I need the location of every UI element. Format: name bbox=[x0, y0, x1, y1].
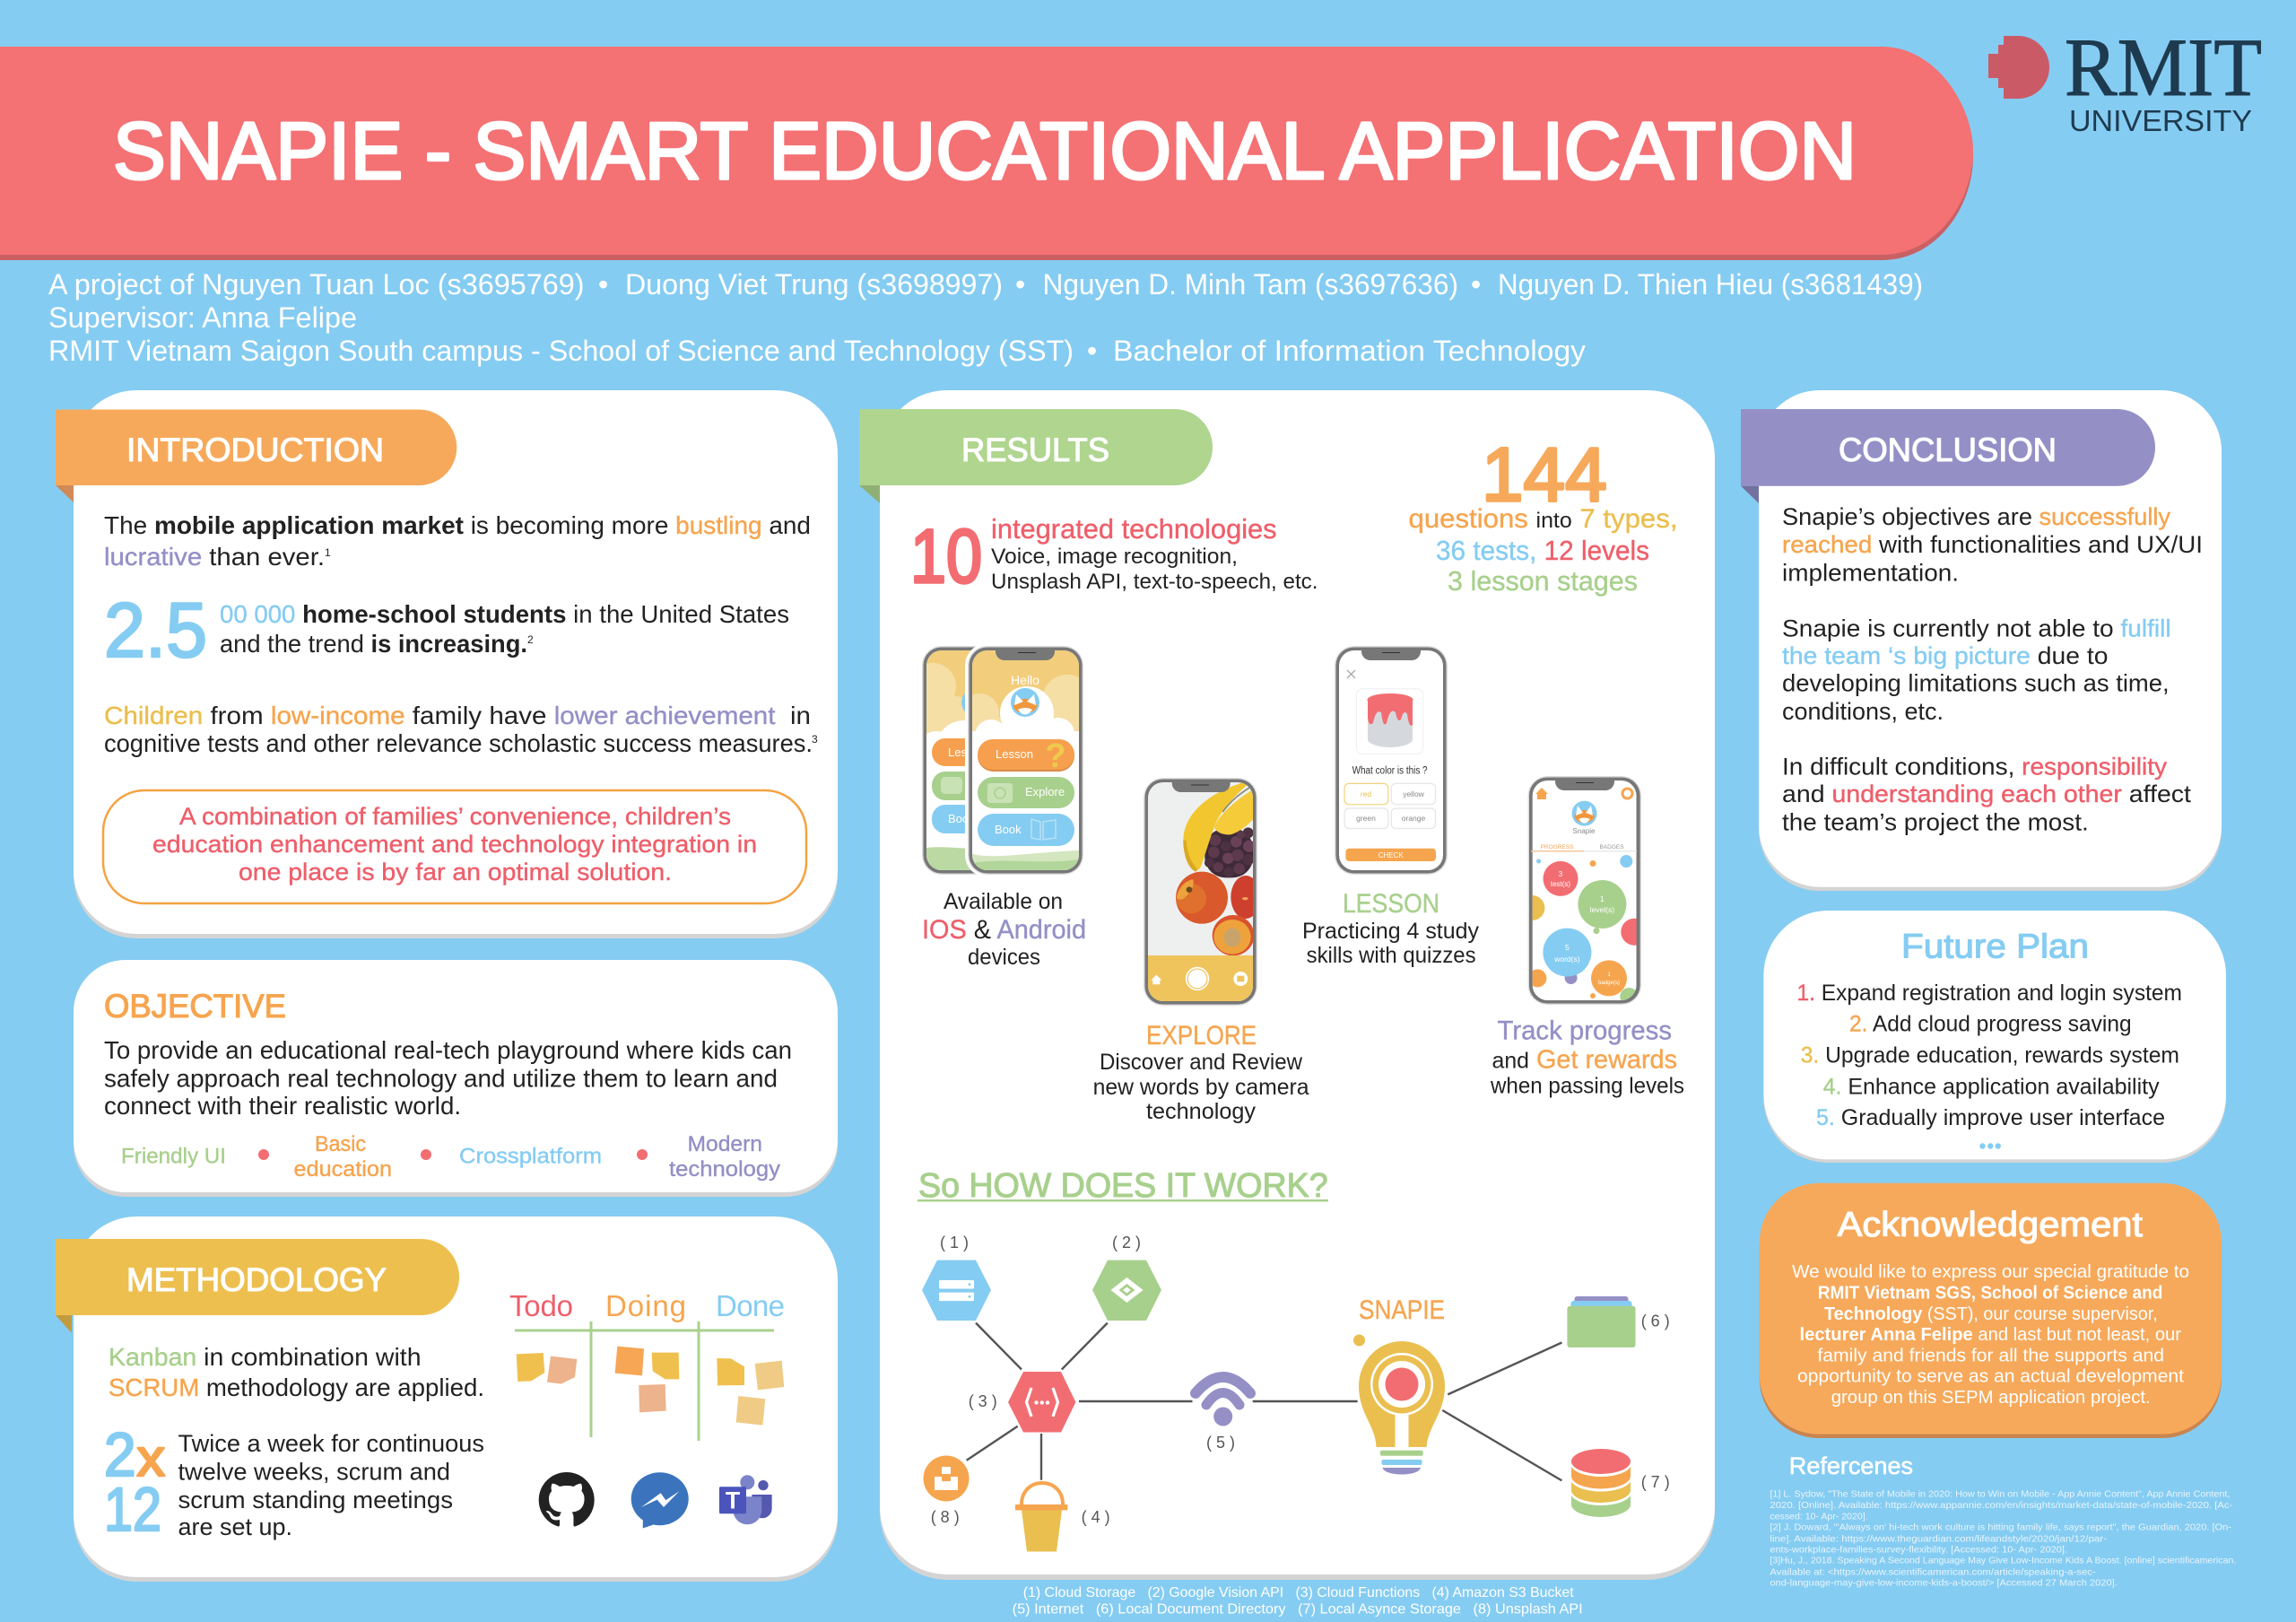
text: objective description: safely approach real technology and utilize them to learn and bbox=[104, 1064, 778, 1093]
icon: internet wifi bbox=[1196, 1377, 1250, 1452]
panel: introduction bbox=[56, 390, 838, 938]
phone: progress screen: 3 bbox=[1559, 870, 1563, 878]
stat: 2.5 million home-school students: 2 bbox=[527, 633, 534, 646]
kanban board: Todo bbox=[509, 1289, 573, 1322]
stat: 10 integrated technologies: Unsplash API, text-to-speech, etc. bbox=[991, 570, 1318, 594]
project authors and affiliation: Duong Viet Trung (s3698997) bbox=[625, 268, 1003, 301]
connector lines bbox=[967, 1323, 1561, 1480]
RMIT University logo: RMIT bbox=[2065, 22, 2262, 113]
stat: 10 integrated technologies: integrated technologies bbox=[991, 513, 1277, 545]
icon: local document directory bbox=[1567, 1296, 1670, 1347]
kanban board: Done bbox=[716, 1289, 785, 1322]
phone: progress screen: word(s) bbox=[1553, 955, 1580, 964]
caption: explore: new words by camera bbox=[1093, 1075, 1309, 1100]
text: mobile market bbox=[104, 511, 811, 571]
phone: progress screen: PROGRESS bbox=[1541, 844, 1574, 850]
phone: progress screen: badge(s) bbox=[1598, 981, 1620, 986]
heading: results ribbon bbox=[859, 409, 1213, 503]
stat: 2x 12: 12 bbox=[104, 1475, 161, 1544]
icon: google vision api bbox=[1092, 1234, 1161, 1321]
project authors and affiliation: Supervisor: Anna Felipe bbox=[48, 301, 357, 334]
panel: future plan bbox=[1763, 911, 2226, 1163]
text: scrum meetings bbox=[178, 1430, 484, 1540]
icon: cloud functions bbox=[969, 1372, 1075, 1432]
icon: microsoft teams bbox=[719, 1475, 772, 1524]
text: low-income children bbox=[104, 702, 818, 757]
heading: introduction ribbon: INTRODUCTION bbox=[126, 432, 384, 468]
phone: lesson quiz screen: green bbox=[1356, 814, 1376, 823]
caption: track progress: when passing levels bbox=[1490, 1073, 1684, 1098]
text: teamwork: the team’s project the most. bbox=[1782, 809, 2089, 836]
phone: progress screen: level(s) bbox=[1590, 905, 1614, 914]
stat: 144 questions: 36 tests, 12 levels bbox=[1436, 535, 1649, 566]
text: objectives reached: implementation. bbox=[1782, 559, 1959, 586]
project authors and affiliation: • bbox=[1471, 268, 1481, 301]
icon: local document directory: ( 6 ) bbox=[1641, 1312, 1670, 1330]
references bbox=[1770, 1452, 2236, 1589]
title banner bbox=[0, 47, 1973, 260]
diagram legend: (1) Cloud Storage (2) Google Vision API (3) Cloud Functions (4) Amazon S3 Bucket bbox=[1023, 1585, 1574, 1600]
RMIT University logo bbox=[1988, 22, 2262, 137]
future plan list bbox=[1797, 981, 2182, 1149]
caption: explore bbox=[1093, 1021, 1309, 1124]
objective keywords: education bbox=[294, 1157, 392, 1182]
text: low-income children: cognitive tests and other relevance scholastic success measures. bbox=[104, 729, 813, 757]
icon: microsoft teams: T bbox=[726, 1487, 740, 1514]
text: acknowledgement body: We would like to express our special gratitude to bbox=[1792, 1261, 2189, 1282]
project authors and affiliation: Bachelor of Information Technology bbox=[1113, 335, 1586, 367]
phone: progress screen: 1 bbox=[1600, 894, 1605, 903]
text: objectives reached bbox=[1782, 503, 2203, 586]
heading: results ribbon: RESULTS bbox=[961, 432, 1109, 468]
references: [1] L. Sydow, "The State of Mobile in 2020: How to Win on Mobile - App Annie Content", App Annie Content, bbox=[1770, 1488, 2230, 1499]
text: teamwork: In difficult conditions, responsibility bbox=[1782, 754, 2168, 780]
objective keywords: technology bbox=[669, 1157, 780, 1182]
stat: 144 questions: 3 lesson stages bbox=[1448, 565, 1638, 597]
heading: conclusion ribbon: CONCLUSION bbox=[1839, 432, 2057, 468]
phone: progress screen: BADGES bbox=[1599, 844, 1624, 850]
icon: unsplash api: ( 8 ) bbox=[931, 1508, 960, 1526]
stat: 144 questions: questions into 7 types, bbox=[1408, 504, 1677, 534]
text: low-income children: 3 bbox=[812, 733, 818, 746]
icon: cloud functions: ( 3 ) bbox=[969, 1392, 997, 1410]
text: objectives reached: reached with functionalities and UX/UI bbox=[1782, 531, 2203, 558]
phone: progress screen bbox=[1528, 776, 1641, 1005]
future plan list: 5. Gradually improve user interface bbox=[1816, 1105, 2165, 1130]
icon: messenger bbox=[631, 1472, 689, 1529]
project authors and affiliation: • bbox=[1087, 335, 1097, 367]
stat: 2.5 million home-school students: 2.5 bbox=[104, 588, 207, 674]
text: kanban and scrum: Kanban in combination with bbox=[109, 1343, 422, 1371]
phone: home screen front: Lesson bbox=[996, 747, 1033, 761]
references: Refercenes bbox=[1789, 1452, 1913, 1479]
diagram legend bbox=[1013, 1585, 1583, 1617]
phone: progress screen: Snapie bbox=[1573, 827, 1596, 835]
phone: progress screen: 1 bbox=[1607, 972, 1611, 978]
text: acknowledgement body bbox=[1792, 1261, 2189, 1408]
caption: lesson bbox=[1302, 889, 1479, 968]
phone: home screen back bbox=[922, 646, 977, 875]
text: mobile market: The mobile application market is becoming more bustling and bbox=[104, 511, 811, 539]
stat: 2.5 million home-school students: 00 000 home-school students in the United States bbox=[220, 600, 789, 628]
text: acknowledgement body: opportunity to serve as an actual development bbox=[1797, 1365, 2184, 1386]
text: low-income children: Children from low-income family have lower achievement in bbox=[104, 702, 811, 729]
project authors and affiliation: Nguyen D. Minh Tam (s3697636) bbox=[1042, 268, 1458, 301]
project authors and affiliation bbox=[48, 268, 1923, 367]
text: limitations: developing limitations such as time, bbox=[1782, 670, 2170, 697]
icon: local async storage bbox=[1570, 1449, 1670, 1517]
phone: home screen front: ? bbox=[1045, 737, 1066, 775]
phone: home screen front: Explore bbox=[1025, 785, 1065, 798]
references: [3]Hu, J., 2018. Speaking A Second Language May Give Low-Income Kids A Boost. [online] scientificamerican. bbox=[1770, 1556, 2236, 1566]
project authors and affiliation: • bbox=[598, 268, 608, 301]
phone: home screen back: Lesson bbox=[948, 746, 986, 759]
icon: internet wifi: ( 5 ) bbox=[1206, 1434, 1235, 1452]
icon: cloud storage bbox=[922, 1234, 991, 1321]
stat: 2x 12: 2 bbox=[104, 1420, 136, 1489]
caption: track progress: Track progress bbox=[1498, 1016, 1672, 1046]
phone: lesson quiz screen: orange bbox=[1402, 814, 1426, 823]
stat: 10 integrated technologies: 10 bbox=[910, 514, 982, 598]
references: [2] J. Doward, "'Always on' hi-tech work culture is hitting family life, says report", the Guardian, 2020. [On- bbox=[1770, 1522, 2232, 1532]
icon: amazon s3 bucket: ( 4 ) bbox=[1082, 1508, 1110, 1526]
text: limitations: Snapie is currently not able to fulfill bbox=[1782, 615, 2171, 641]
phone: progress screen: 5 bbox=[1565, 943, 1570, 952]
text: acknowledgement body: Technology (SST), our course supervisor, bbox=[1824, 1304, 2158, 1324]
stat: 2.5 million home-school students: and the trend is increasing. bbox=[220, 630, 527, 658]
objective keywords: Crossplatform bbox=[459, 1145, 602, 1168]
references: cessed: 10- Apr- 2020]. bbox=[1770, 1511, 1868, 1522]
callout: optimal solution: A combination of families’ convenience, children’s bbox=[179, 803, 731, 830]
title banner: SNAPIE - SMART EDUCATIONAL APPLICATION bbox=[113, 107, 1857, 196]
icon: snapie bulb bbox=[1353, 1295, 1445, 1475]
phone: lesson quiz screen bbox=[1335, 646, 1448, 875]
stat: 10 integrated technologies: Voice, image recognition, bbox=[991, 545, 1238, 569]
icon: local async storage: ( 7 ) bbox=[1641, 1473, 1670, 1491]
references: ents-workplace-families-survey-flexibility. [Accessed: 10- Apr- 2020]. bbox=[1770, 1545, 2067, 1556]
stat: 144 questions bbox=[1408, 432, 1677, 597]
text: objectives reached: Snapie’s objectives are successfully bbox=[1782, 503, 2171, 530]
project authors and affiliation: RMIT Vietnam Saigon South campus - School of Science and Technology (SST) bbox=[48, 335, 1074, 367]
stat: 10 integrated technologies bbox=[910, 513, 1318, 598]
icon: amazon s3 bucket bbox=[1015, 1483, 1110, 1552]
phone: home screen front bbox=[965, 646, 1083, 875]
caption: lesson: skills with quizzes bbox=[1307, 943, 1476, 968]
text: teamwork: and understanding each other affect bbox=[1782, 780, 2192, 807]
diagram legend: (5) Internet (6) Local Document Directory (7) Local Asynce Storage (8) Unsplash API bbox=[1013, 1602, 1583, 1617]
phone: home screen back: Book bbox=[948, 812, 975, 825]
future plan list: 2. Add cloud progress saving bbox=[1849, 1012, 2132, 1037]
text: mobile market: lucrative than ever. bbox=[104, 543, 325, 571]
callout: optimal solution: one place is by far an optimal solution. bbox=[239, 859, 672, 885]
caption: available on: Available on bbox=[944, 889, 1063, 914]
text: objective description bbox=[104, 1036, 792, 1120]
text: acknowledgement body: RMIT Vietnam SGS, School of Science and bbox=[1818, 1282, 2162, 1303]
caption: track progress: and Get rewards bbox=[1492, 1046, 1677, 1075]
panel: results bbox=[859, 390, 1715, 1580]
heading: conclusion ribbon bbox=[1741, 409, 2155, 503]
text: kanban and scrum bbox=[109, 1343, 484, 1401]
project authors and affiliation: A project of Nguyen Tuan Loc (s3695769) bbox=[48, 268, 585, 301]
caption: explore: EXPLORE bbox=[1146, 1021, 1257, 1051]
heading: methodology ribbon: METHODOLOGY bbox=[126, 1261, 387, 1298]
panel: methodology bbox=[56, 1216, 838, 1582]
architecture diagram bbox=[922, 1234, 1670, 1552]
phone: home screen front: Book bbox=[995, 823, 1022, 836]
stat: 2x 12: x bbox=[137, 1429, 165, 1487]
future plan list: 3. Upgrade education, rewards system bbox=[1801, 1042, 2179, 1068]
objective keywords: Basic bbox=[315, 1132, 366, 1156]
stat: 2x 12 bbox=[104, 1420, 165, 1544]
objective keywords: Friendly UI bbox=[121, 1145, 226, 1168]
heading: future plan: Future Plan bbox=[1901, 928, 2089, 965]
text: mobile market: 1 bbox=[325, 546, 331, 559]
text: scrum meetings: twelve weeks, scrum and bbox=[178, 1459, 450, 1486]
references: 2020. [Online]. Available: https://www.appannie.com/en/insights/market-data/state-of-mobile-2020. [Ac- bbox=[1770, 1500, 2233, 1511]
text: teamwork bbox=[1782, 754, 2192, 836]
panel: conclusion bbox=[1741, 390, 2222, 891]
references: ond-language-may-give-low-income-kids-a-boost/> [Accessed 27 March 2020]. bbox=[1770, 1578, 2118, 1589]
RMIT University logo: UNIVERSITY bbox=[2069, 104, 2252, 137]
phone: lesson quiz screen: yellow bbox=[1403, 789, 1425, 798]
text: limitations: the team ‘s big picture due to bbox=[1782, 642, 2108, 669]
phone: progress screen: test(s) bbox=[1551, 880, 1570, 888]
icon: github bbox=[539, 1472, 595, 1526]
future plan list: 1. Expand registration and login system bbox=[1797, 981, 2182, 1006]
heading: objective: OBJECTIVE bbox=[104, 988, 286, 1025]
text: limitations bbox=[1782, 615, 2171, 725]
heading: methodology ribbon bbox=[56, 1239, 459, 1333]
text: limitations: conditions, etc. bbox=[1782, 698, 1944, 725]
references: Available at: <https://www.scientificamerican.com/article/speaking-a-sec- bbox=[1770, 1566, 2096, 1577]
caption: available on: devices bbox=[968, 945, 1040, 970]
callout: optimal solution: education enhancement and technology integration in bbox=[152, 831, 757, 858]
callout: optimal solution bbox=[103, 790, 806, 903]
panel: objective bbox=[74, 960, 838, 1197]
references: line]. Available: https://www.theguardian.com/lifeandstyle/2020/jan/12/par- bbox=[1770, 1533, 2108, 1544]
text: scrum meetings: are set up. bbox=[178, 1513, 292, 1540]
phone: explore camera screen bbox=[1144, 778, 1261, 1006]
stat: 144 questions: 144 bbox=[1482, 432, 1607, 517]
text: objective description: To provide an educational real-tech playground where kids can bbox=[104, 1036, 792, 1064]
text: acknowledgement body: family and friends for all the supports and bbox=[1817, 1346, 2164, 1365]
caption: available on bbox=[922, 889, 1086, 970]
project authors and affiliation: Nguyen D. Thien Hieu (s3681439) bbox=[1498, 268, 1923, 301]
panel: acknowledgement bbox=[1760, 1183, 2222, 1438]
heading: introduction ribbon bbox=[56, 409, 457, 502]
icon: unsplash api bbox=[924, 1455, 969, 1526]
icon: snapie bulb: SNAPIE bbox=[1359, 1295, 1445, 1325]
phone: lesson quiz screen: red bbox=[1361, 789, 1371, 798]
phone: home screen front: Hello bbox=[1011, 673, 1039, 687]
text: acknowledgement body: group on this SEPM application project. bbox=[1831, 1387, 2151, 1408]
caption: explore: technology bbox=[1146, 1099, 1256, 1124]
text: scrum meetings: scrum standing meetings bbox=[178, 1487, 453, 1513]
phone: lesson quiz screen: CHECK bbox=[1378, 851, 1404, 859]
objective keywords: Modern bbox=[687, 1132, 762, 1156]
heading: acknowledgement: Acknowledgement bbox=[1838, 1206, 2143, 1244]
objective keywords bbox=[121, 1132, 780, 1182]
heading: how does it work: So HOW DOES IT WORK? bbox=[918, 1167, 1328, 1205]
caption: lesson: Practicing 4 study bbox=[1302, 919, 1479, 944]
caption: available on: IOS & Android bbox=[922, 915, 1086, 945]
project authors and affiliation: • bbox=[1015, 268, 1025, 301]
caption: track progress bbox=[1490, 1016, 1684, 1098]
text: objective description: connect with their realistic world. bbox=[104, 1092, 461, 1120]
phone: lesson quiz screen: What color is this ? bbox=[1352, 766, 1428, 777]
kanban board bbox=[509, 1289, 785, 1441]
text: scrum meetings: Twice a week for continuous bbox=[178, 1430, 484, 1457]
caption: explore: Discover and Review bbox=[1100, 1050, 1303, 1075]
caption: lesson: LESSON bbox=[1343, 889, 1439, 919]
future plan list: 4. Enhance application availability bbox=[1823, 1074, 2160, 1099]
text: kanban and scrum: SCRUM methodology are applied. bbox=[109, 1373, 484, 1401]
kanban board: Doing bbox=[605, 1289, 686, 1322]
icon: cloud storage: ( 1 ) bbox=[940, 1234, 969, 1251]
icon: google vision api: ( 2 ) bbox=[1112, 1234, 1141, 1251]
stat: 2.5 million home-school students bbox=[104, 588, 789, 674]
text: acknowledgement body: lecturer Anna Felipe and last but not least, our bbox=[1799, 1324, 2181, 1345]
